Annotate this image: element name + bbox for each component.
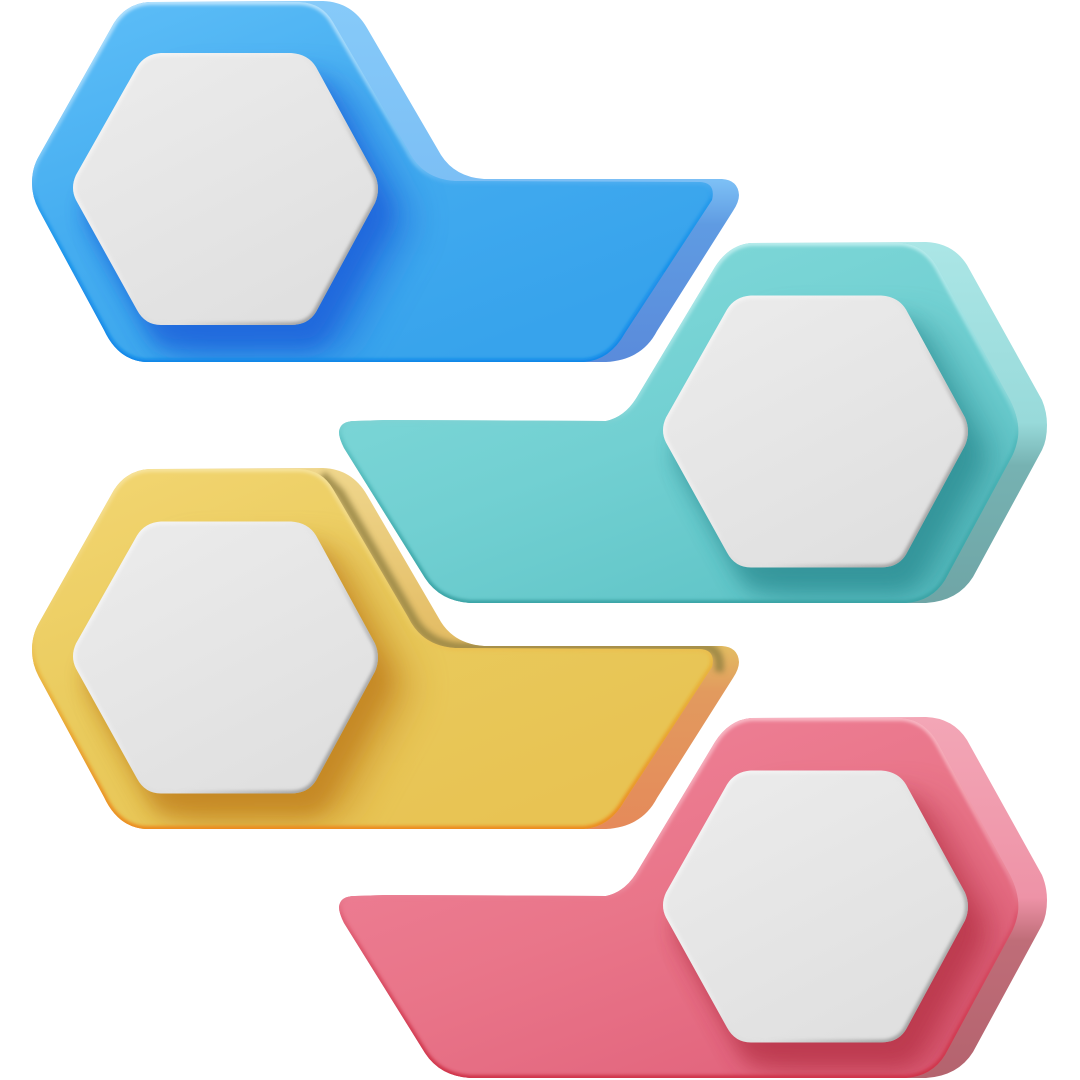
yellow tab front face — [32, 469, 713, 829]
yellow tab crease shadow — [322, 475, 719, 672]
panel: blue tab — [32, 1, 739, 362]
panel: pink tab — [339, 717, 1047, 1078]
blue tab hexagon — [73, 53, 378, 325]
pink tab hexagon — [663, 770, 968, 1042]
yellow tab side depth — [32, 468, 739, 829]
pink tab side depth — [339, 717, 1047, 1078]
yellow tab hexagon — [73, 522, 378, 794]
teal tab side depth — [339, 242, 1047, 603]
pink tab shading and rim — [339, 718, 1018, 1078]
teal tab front face — [339, 243, 1018, 603]
panel: teal tab — [339, 242, 1047, 603]
yellow tab shading and rim — [32, 469, 713, 829]
teal tab hexagon — [663, 296, 968, 568]
blue tab shading and rim — [32, 2, 713, 362]
pink tab front face — [339, 718, 1018, 1078]
blue tab front face — [32, 2, 713, 362]
blue tab side depth — [32, 1, 739, 362]
panel: yellow tab — [32, 468, 739, 829]
teal tab shading and rim — [339, 243, 1018, 603]
